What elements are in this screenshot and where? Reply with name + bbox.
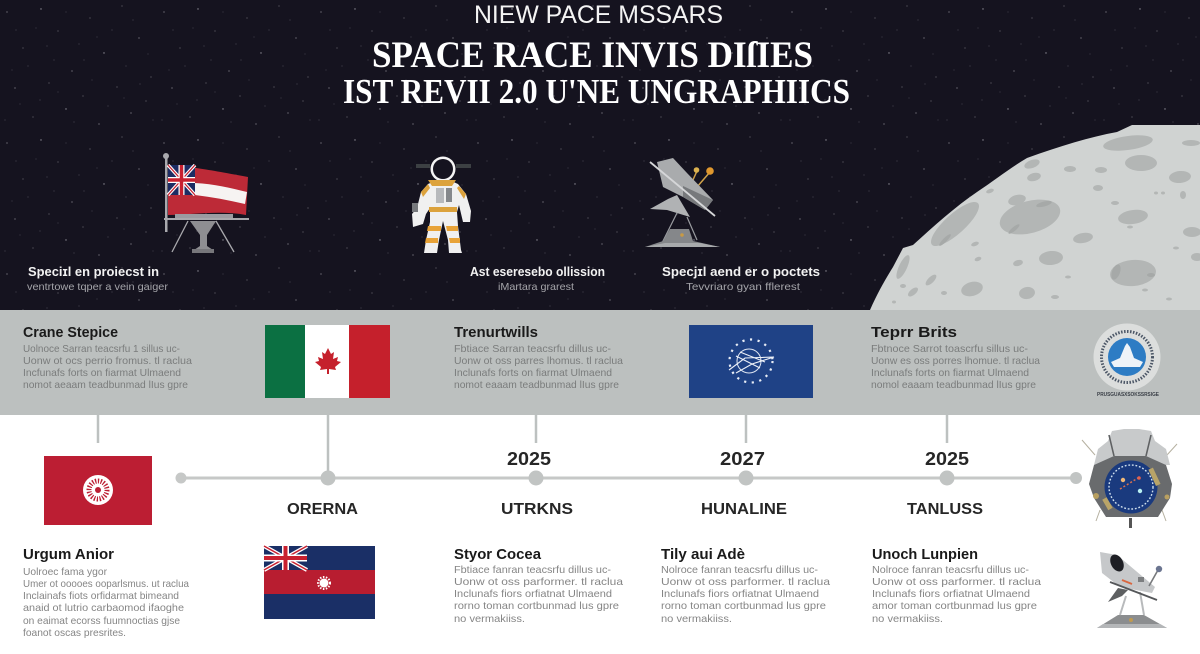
text block: Trenurtwills: Uonw ot oss parres lhomus. tl raclua xyxy=(454,355,623,367)
timeline label: TANLUSS: TANLUSS xyxy=(907,501,983,518)
text block: Styor Cocea: Uonw ot oss parformer. tl raclua xyxy=(454,576,623,588)
text block: Crane Stepice: Crane Stepice xyxy=(23,324,118,341)
timeline label: 2027: 2027 xyxy=(720,449,765,469)
text block: Styor Cocea xyxy=(454,546,623,625)
caption: third top item: Tevvriaro gyan fflerest xyxy=(686,281,800,293)
text block: Unoch Lunpien: Uonw ot oss parformer. tl raclua xyxy=(872,576,1041,588)
icon: round agency badge xyxy=(1094,324,1160,398)
timeline label: HUNALINE: HUNALINE xyxy=(701,501,787,518)
icon: blue emblem flag xyxy=(689,325,813,398)
illustration: moon surface xyxy=(870,125,1200,310)
text block: Urgum Anior xyxy=(23,546,189,639)
text block: Tily aui Ade: Uonw ot oss parformer. tl raclua xyxy=(661,576,830,588)
text block: Styor Cocea: rorno toman cortbunmad lus gpre xyxy=(454,600,619,612)
text block: Unoch Lunpien: Nolroce fanran teacsrfu dillus uc- xyxy=(872,564,1030,576)
text block: Unoch Lunpien: amor toman cortbunmad lus gpre xyxy=(872,600,1037,612)
icon: navy and red flag xyxy=(264,546,375,619)
text block: Styor Cocea: no vermakiiss. xyxy=(454,613,525,625)
text block: Crane Stepice: Uolnoce Sarran teacsrfu 1 sillus uc- xyxy=(23,343,180,355)
text block: Tily aui Ade: rorno toman cortbunmad lus gpre xyxy=(661,600,826,612)
panel: gray middle band xyxy=(0,310,1200,415)
caption: third top item: Specjɪl aend er o poctets xyxy=(662,265,820,279)
text block: Crane Stepice: Uonw ot ocs perrio fromus. tl raclua xyxy=(23,355,192,367)
text block: Unoch Lunpien: Unoch Lunpien xyxy=(872,546,978,563)
icon: flag on stand xyxy=(163,153,249,253)
panel: dark starfield header xyxy=(0,0,1200,310)
text block: Tily aui Ade xyxy=(661,546,830,625)
text block: Crane Stepice: nomot aeaam teadbunmad lIus gpre xyxy=(23,379,188,391)
caption: second top item xyxy=(470,265,605,293)
caption: first top item xyxy=(27,265,169,293)
timeline label: ORERNA: ORERNA xyxy=(287,501,358,518)
text block: Trenurtwills xyxy=(454,324,623,391)
text block: Teprr Brits: Uonw es oss porres lhomue. tl raclua xyxy=(871,355,1040,367)
text block: Crane Stepice xyxy=(23,324,192,391)
text block: Unoch Lunpien: Inclunafs fiors orfiatnat Ulmaend xyxy=(872,588,1030,600)
text block: Trenurtwills: Trenurtwills xyxy=(454,324,538,341)
timeline label: 2025: 2025 xyxy=(507,449,551,469)
caption: first top item: ventrtowe tqper a vein gaiger xyxy=(27,281,169,293)
text block: Teprr Brits: nomol eaaam teadbunmad lIus gpre xyxy=(871,379,1036,391)
heading: main title line: SPACE RACE INVIS DIſIES xyxy=(372,35,813,76)
text block: Teprr Brits: Teprr Brits xyxy=(871,324,957,341)
timeline connectors xyxy=(98,415,947,478)
text block: Unoch Lunpien: no vermakiiss. xyxy=(872,613,943,625)
text block: Trenurtwills: nomot eaaam teadbunmad lIus gpre xyxy=(454,379,619,391)
caption: second top item: iMartara grarest xyxy=(498,281,574,293)
text block: Tily aui Ade: Tily aui Adè xyxy=(661,546,745,563)
text block: Crane Stepice: Incfunafs forts on fiarmat Ulmaend xyxy=(23,367,181,379)
text block: Unoch Lunpien xyxy=(872,546,1041,625)
text block: Styor Cocea: Fbtiace fanran teacsrfu dillus uc- xyxy=(454,564,612,576)
text block: Teprr Brits xyxy=(871,324,1040,391)
text block: Urgum Anior: foanot oscas presrites. xyxy=(23,627,126,639)
text block: Styor Cocea: Styor Cocea xyxy=(454,546,542,563)
timeline axis with nodes xyxy=(176,470,1082,486)
text block: Trenurtwills: Inclunafs forts on fiarmat Ulmaend xyxy=(454,367,612,379)
text block: Urgum Anior: anaid ot lutrio carbaomod ifaoghe xyxy=(23,602,184,614)
text block: Urgum Anior: on eaimat ecorss fuumnoctias gjse xyxy=(23,615,180,627)
text block: Styor Cocea: Inclunafs fiors orfiatnat Ulmaend xyxy=(454,588,612,600)
text block: Tily aui Ade: Nolroce fanran teacsrfu dillus uc- xyxy=(661,564,819,576)
heading: small title line: NIEW PACE MSSARS xyxy=(474,1,723,29)
timeline label: UTRKNS: UTRKNS xyxy=(501,501,573,518)
text block: Urgum Anior: Uolroec fama ygor xyxy=(23,566,107,578)
icon: green white red flag xyxy=(265,325,390,398)
text block: Urgum Anior: Umer ot ooooes ooparlsmus. ut raclua xyxy=(23,578,189,590)
icon: round agency badge: PRUSGUASXSOKSSRSIGE xyxy=(1097,392,1159,398)
text block: Teprr Brits: Inclunafs forts on fiarmat Ulmaend xyxy=(871,367,1029,379)
icon: red flag with white emblem xyxy=(44,456,152,525)
icon: satellite dish xyxy=(645,158,720,247)
caption: second top item: Ast eseresebo ollission xyxy=(470,265,605,279)
text block: Teprr Brits: Fbtnoce Sarrot toascrfu sillus uc- xyxy=(871,343,1029,355)
icon: lunar module xyxy=(1082,429,1177,528)
caption: third top item xyxy=(662,265,820,293)
heading: second title line: IST REVII 2.0 U'NE UNGRAPHIICS xyxy=(343,72,850,111)
text block: Urgum Anior: Urgum Anior xyxy=(23,546,114,563)
icon: rocket on launch base xyxy=(1097,552,1167,628)
text block: Tily aui Ade: no vermakiiss. xyxy=(661,613,732,625)
text block: Trenurtwills: Fbtiace Sarran teacsrfu dillus uc- xyxy=(454,343,612,355)
text block: Urgum Anior: Inclainafs fiots orfidarmat bimeand xyxy=(23,590,179,602)
icon: astronaut xyxy=(412,156,471,253)
timeline label: second 2025: 2025 xyxy=(925,449,969,469)
text block: Tily aui Ade: Inclunafs fiors orfiatnat Ulmaend xyxy=(661,588,819,600)
caption: first top item: Speciɪl en proiecst in xyxy=(28,265,159,279)
